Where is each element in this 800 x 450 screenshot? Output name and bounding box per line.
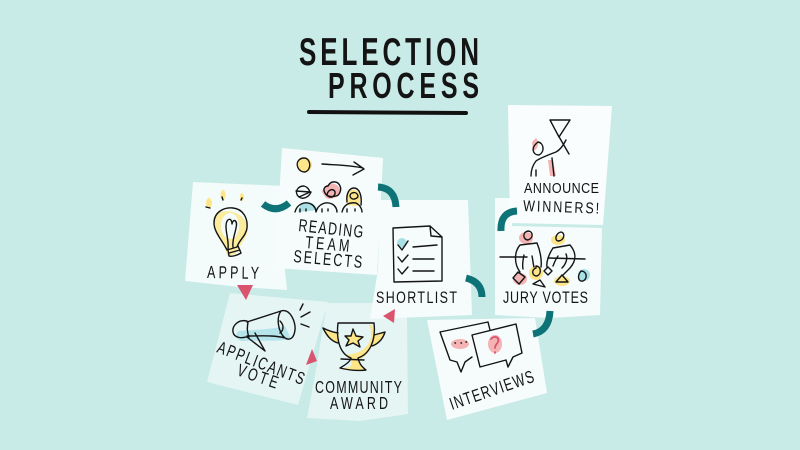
title xyxy=(299,31,479,113)
panel: community award: AWARD xyxy=(330,394,388,414)
panel: community award xyxy=(307,303,408,421)
icon: megaphone xyxy=(233,304,310,351)
panel: applicants vote xyxy=(207,293,328,405)
arrow: shortlist to interviews xyxy=(466,278,482,297)
label: reading team selects: READING xyxy=(298,216,364,242)
arrow: applicants vote to community award xyxy=(306,349,317,365)
panel: shortlist xyxy=(370,200,472,319)
label: announce winners: ANNOUNCE xyxy=(524,180,599,196)
icon: checklist xyxy=(393,226,442,282)
arrow: reading team to shortlist xyxy=(378,187,396,207)
panel: interviews xyxy=(427,318,547,420)
label: apply: APPLY xyxy=(207,263,259,284)
icon: trophy xyxy=(323,323,385,371)
label: interviews: INTERVIEWS xyxy=(447,367,537,414)
arrow: community award to shortlist xyxy=(383,309,395,323)
panel: announce winners xyxy=(508,105,612,225)
arrow: jury to announce xyxy=(501,211,517,231)
label: shortlist: SHORTLIST xyxy=(376,289,457,308)
panel: announce winners: WINNERS! xyxy=(523,197,599,217)
panel: reading team selects: TEAM xyxy=(305,233,350,256)
panel: applicants vote: VOTE xyxy=(235,361,281,393)
title: SELECTION xyxy=(299,31,479,74)
icon: speech bubbles xyxy=(440,322,522,372)
arrow: apply to applicants vote xyxy=(237,285,253,300)
icon: flag holder xyxy=(531,120,570,176)
label: jury votes: JURY VOTES xyxy=(503,289,588,308)
panel: reading team selects xyxy=(275,148,383,275)
label: applicants vote: APPLICANTS xyxy=(214,338,307,389)
label: community award: COMMUNITY xyxy=(315,378,402,398)
icon: lightbulb xyxy=(206,190,248,256)
arrow: apply to reading team xyxy=(263,203,289,209)
icon: reading team xyxy=(295,158,364,212)
panel: jury votes xyxy=(495,198,602,318)
icon: jury xyxy=(500,231,590,287)
panel: apply xyxy=(185,182,287,290)
panel: reading team selects: SELECTS xyxy=(293,247,363,273)
title: PROCESS xyxy=(328,65,479,106)
arrow: interviews to jury xyxy=(533,311,550,334)
